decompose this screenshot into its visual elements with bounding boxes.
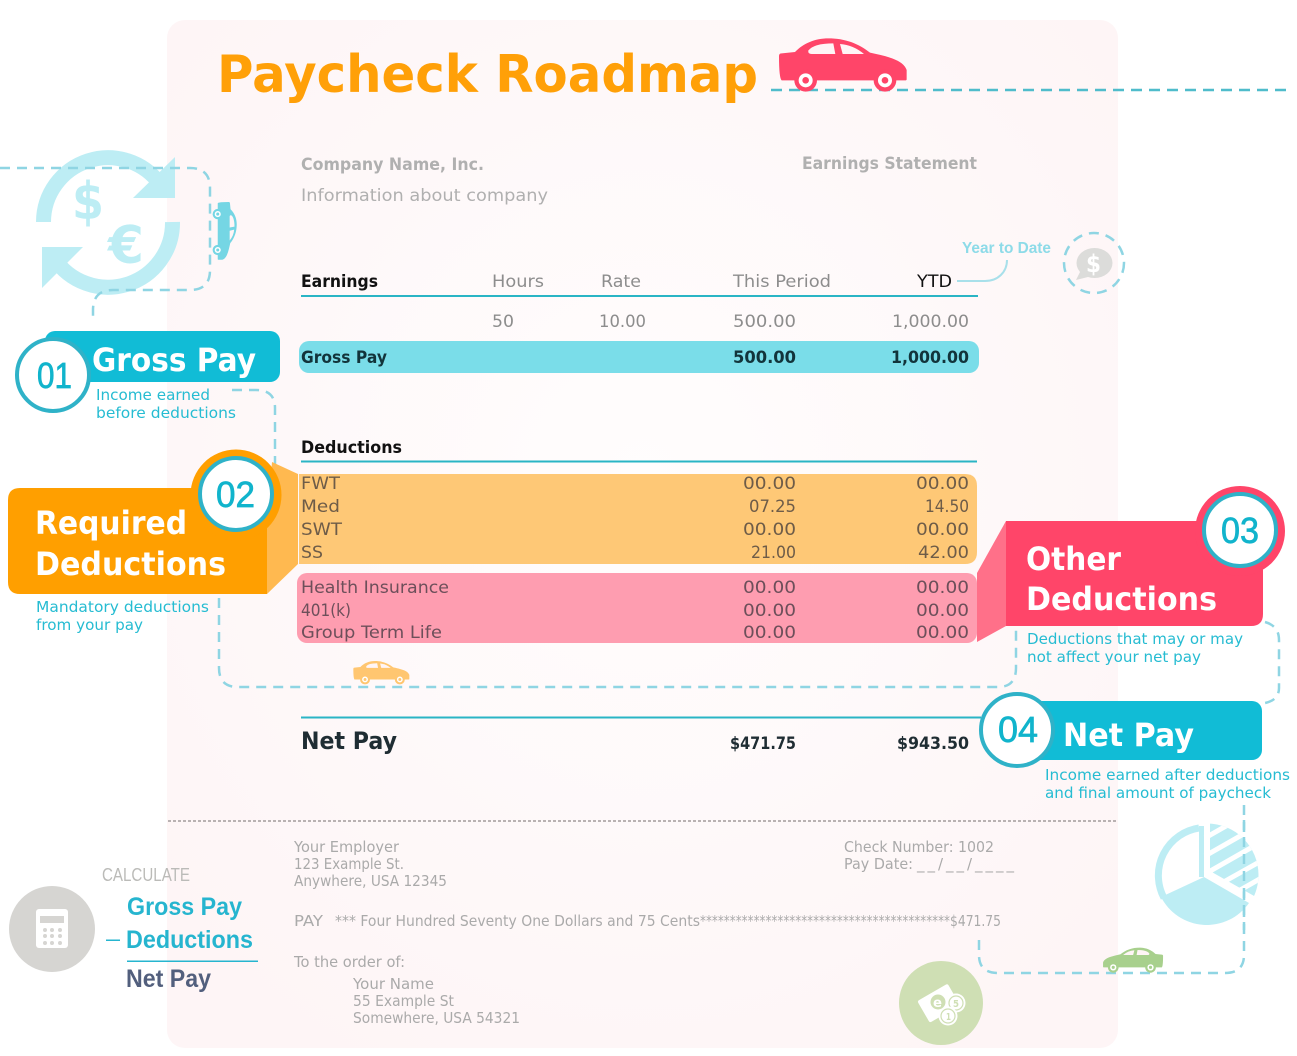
callout: 02 required deductions: Deductions [35,545,226,583]
check: amount line: $471.75 [950,912,1001,930]
road: from gross pay to required deductions [232,390,275,468]
callout: 01 gross pay: 01 [37,355,72,396]
callout: 04 net pay: 04 [998,709,1038,750]
callout: 03 other deductions: Deductions that may or may [1027,630,1243,648]
icon: money circle [899,961,983,1045]
road: top dashed road [771,89,1292,91]
road: from required deductions to other deductions [219,598,1016,687]
callout: 02 required deductions: Mandatory deductions [36,598,209,616]
icon: speech bubble dollar: $ [1086,250,1101,278]
other deductions rows: Health Insurance [301,578,449,598]
other deductions rows: 00.00 [916,578,969,598]
callout: 01 gross pay: before deductions [96,404,236,422]
earnings header row: Earnings [301,272,378,292]
callout: 02 required deductions: 02 [216,474,255,515]
callout: 04 net pay: and final amount of paycheck [1045,784,1271,802]
callout: 01 gross pay [17,331,280,422]
formula: calculate net pay [102,865,258,993]
gross pay row: 1,000.00 [891,348,969,368]
callout: year to date: Year to Date [962,240,1051,257]
check: employer address: Your Employer [293,838,400,856]
callout: 02 required deductions: from your pay [36,616,143,634]
check: amount line: *** Four Hundred Seventy One Dollars and 75 Cents [335,912,700,930]
callout: 04 net pay [981,694,1290,802]
callout: 01 gross pay: Income earned [96,386,210,404]
callout: 02 required deductions: Required [35,504,187,542]
check: employer address: Anywhere, USA 12345 [294,872,447,890]
title: Paycheck Roadmap [217,45,758,105]
earnings values row: 1,000.00 [892,312,969,332]
net pay row: $471.75 [730,734,796,754]
other deductions rows: Group Term Life [301,623,442,643]
other deductions rows [297,573,977,643]
icon: currency exchange arrows [42,157,175,288]
icon: money circle: 5 [953,999,959,1010]
required deductions rows: SWT [301,520,343,540]
check: payee: To the order of: [293,953,405,971]
icon: money circle: e [933,996,942,1011]
check: payee [293,953,520,1027]
required deductions rows: 21.00 [751,543,796,563]
icon: blue car on road [213,202,237,260]
statement heading: Earnings Statement [802,154,977,174]
company header: Information about company [301,186,548,206]
road: from other deductions to net pay [1265,622,1279,703]
road: from net pay to check [979,805,1244,973]
required deductions rows: FWT [301,474,341,494]
check: number and date: Pay Date: [844,855,913,873]
formula: calculate net pay: CALCULATE [102,865,190,885]
earnings header row [301,272,978,297]
earnings header row: Rate [601,272,641,292]
earnings values row [492,312,969,332]
icon: orange car on road [353,661,409,684]
icon: red car [779,38,907,92]
formula: calculate net pay: Net Pay [126,965,211,993]
required deductions rows: 00.00 [916,520,969,540]
required deductions rows: 14.50 [925,497,969,517]
callout: 03 other deductions: Other [1026,540,1121,578]
check: payee: Somewhere, USA 54321 [353,1009,520,1027]
required deductions rows: 07.25 [749,497,796,517]
required deductions rows: 42.00 [918,543,969,563]
check: amount line: ****************************************** [700,912,950,930]
check: amount line [294,912,1001,930]
check: number and date: __/__/____ [916,855,1014,874]
required deductions rows: 00.00 [743,474,796,494]
callout: 03 other deductions: not affect your net pay [1027,648,1201,666]
required deductions rows: Med [301,497,340,517]
icon: speech bubble dollar [1064,233,1124,293]
other deductions rows: 00.00 [916,623,969,643]
check: number and date: Check Number: 1002 [844,838,994,856]
callout: 02 required deductions [8,450,298,634]
net pay row [301,716,981,755]
gross pay row: 500.00 [733,348,796,368]
check: employer address [293,838,447,890]
check tear line [168,820,1118,822]
gross pay row [299,341,979,373]
check: payee: Your Name [352,975,434,993]
check: number and date [844,838,1014,874]
check: employer address: 123 Example St. [294,855,404,873]
icon: currency exchange arrows: $ [72,172,104,232]
icon: money circle: 1 [946,1012,951,1023]
gross pay row: Gross Pay [301,348,387,368]
formula: calculate net pay: Gross Pay [127,893,242,921]
callout: year to date [957,240,1051,281]
required deductions rows: 00.00 [916,474,969,494]
earnings header row: YTD [916,272,952,292]
earnings values row: 500.00 [733,312,796,332]
other deductions rows: 00.00 [916,601,969,621]
callout: 04 net pay: Income earned after deductions [1045,766,1290,784]
icon: calculator [9,886,95,972]
earnings header row: Hours [492,272,544,292]
other deductions rows: 00.00 [743,623,796,643]
panel: paystub background [167,20,1118,1048]
earnings values row: 10.00 [599,312,646,332]
other deductions rows: 00.00 [743,578,796,598]
other deductions rows: 00.00 [743,601,796,621]
icon: currency exchange arrows: € [107,216,144,276]
required deductions rows: 00.00 [743,520,796,540]
net pay row: Net Pay [301,727,397,755]
check: amount line: PAY [294,912,324,930]
earnings header row: This Period [732,272,831,292]
other deductions rows: 401(k) [301,601,351,621]
icon: green car on road [1103,948,1163,973]
road: left dashed road into gross pay [0,168,210,320]
deductions heading: Deductions [301,438,402,458]
callout: 04 net pay: Net Pay [1063,716,1194,754]
icon: pie chart [1154,820,1258,930]
required deductions rows [299,474,977,564]
callout: 03 other deductions: 03 [1221,510,1259,551]
company header [301,155,548,206]
callout: 03 other deductions: Deductions [1026,580,1217,618]
callout: 03 other deductions [977,486,1285,666]
company header: Company Name, Inc. [301,155,484,175]
required deductions rows: SS [301,543,323,563]
net pay row: $943.50 [897,734,969,754]
check: payee: 55 Example St [353,992,454,1010]
formula: calculate net pay: Deductions [126,926,253,954]
earnings values row: 50 [492,312,514,332]
callout: 01 gross pay: Gross Pay [92,341,256,379]
